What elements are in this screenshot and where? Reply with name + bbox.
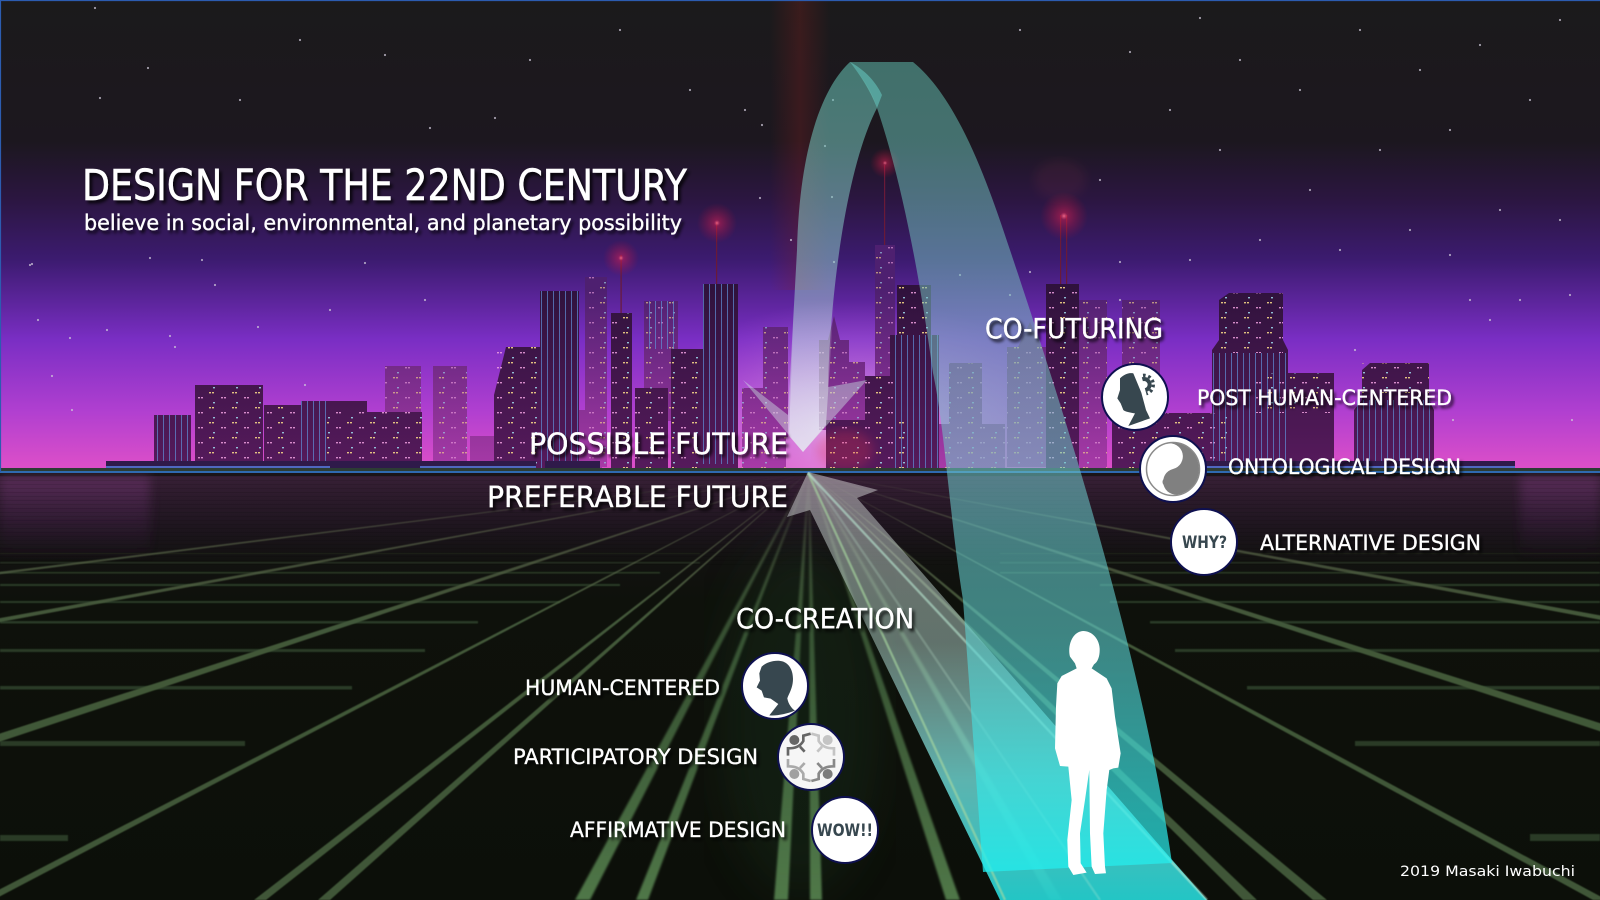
building reflections <box>0 476 1600 566</box>
fold highlight <box>850 62 882 108</box>
label: post human-centered: POST HUMAN-CENTERED <box>1197 386 1452 410</box>
frame edge <box>0 0 1600 472</box>
platform <box>106 461 1515 468</box>
near buildings <box>154 284 1434 468</box>
icon: wow!!: WOW!! <box>817 821 873 841</box>
subtitle: believe in social, environmental, and planetary possibility <box>84 211 682 235</box>
icon: yin yang <box>1140 436 1206 502</box>
central ground glow <box>720 545 880 895</box>
ground and water <box>0 472 1600 900</box>
label: co-futuring: CO-FUTURING <box>985 312 1163 345</box>
label: co-creation: CO-CREATION <box>736 602 914 635</box>
icon: why? <box>1171 509 1237 575</box>
outer radial grid lines <box>0 472 1600 900</box>
blue line facades <box>154 284 1434 468</box>
title: DESIGN FOR THE 22ND CENTURY <box>82 161 688 211</box>
red glow at city base <box>817 430 873 470</box>
background sky <box>0 0 1600 472</box>
right strip of the arch <box>850 62 1172 872</box>
person silhouette <box>1055 631 1121 875</box>
icon: why?: WHY? <box>1182 533 1227 553</box>
preferable future path arrow <box>787 472 1207 900</box>
horizontal grid lines <box>0 553 1600 841</box>
near building windows <box>195 284 1429 468</box>
path light lines <box>808 473 1207 900</box>
possible future arch band <box>743 62 1172 872</box>
credit: 2019 Masaki Iwabuchi <box>1400 864 1575 880</box>
label: affirmative design: AFFIRMATIVE DESIGN <box>570 818 786 842</box>
stars <box>30 8 1572 420</box>
far building windows <box>385 245 1160 470</box>
label: possible future: POSSIBLE FUTURE <box>529 427 788 461</box>
red vertical light beam <box>770 0 830 290</box>
label: participatory design: PARTICIPATORY DESIGN <box>513 745 758 769</box>
arrow shaft glow <box>789 300 834 452</box>
horizon line <box>0 468 1600 473</box>
far buildings <box>385 245 1160 470</box>
icon: post human head with gear <box>1102 364 1168 430</box>
antenna lights <box>603 148 1088 315</box>
label: human-centered: HUMAN-CENTERED <box>525 676 720 700</box>
city skyline <box>106 245 1515 470</box>
perspective grid <box>0 472 1600 900</box>
central radial grid lines <box>575 472 1062 900</box>
icon: wow!! <box>812 797 878 863</box>
left strip and possible future arrowhead <box>743 62 877 452</box>
label: ontological design: ONTOLOGICAL DESIGN <box>1228 455 1461 479</box>
label: alternative design: ALTERNATIVE DESIGN <box>1260 531 1481 555</box>
icon: participatory circle of people <box>778 724 844 790</box>
label: preferable future: PREFERABLE FUTURE <box>487 480 788 514</box>
horizon glow <box>640 300 1080 560</box>
icon: human head <box>742 653 808 719</box>
